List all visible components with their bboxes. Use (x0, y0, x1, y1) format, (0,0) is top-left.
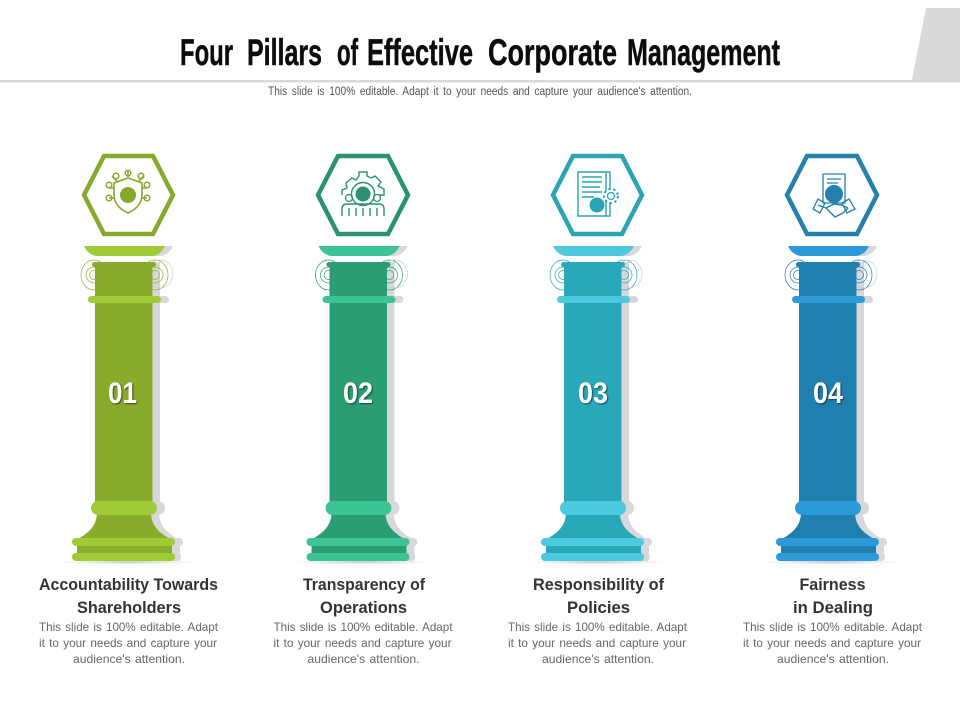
column: pillar 2 (292, 246, 432, 564)
description: pillar 4 (743, 620, 923, 666)
description: pillar 1 (39, 620, 219, 666)
number: 03: 03 (578, 377, 608, 410)
description: pillar 3: This slide is 100% editable. Adapt (508, 620, 688, 634)
panel: pillar 3 (508, 156, 688, 666)
heading: pillar 1 (39, 575, 218, 617)
subtitle: This slide is 100% editable. Adapt it to your needs and capture your audience's attention. (268, 86, 692, 98)
column: pillar 4 (762, 246, 902, 564)
icon: document and gears hexagon (553, 156, 642, 234)
heading: pillar 3: Responsibility of (533, 575, 664, 594)
heading: pillar 1: Accountability Towards (39, 575, 218, 594)
number: 01: 01 (108, 377, 137, 410)
description: pillar 1: it to your needs and capture your (39, 636, 217, 650)
description: pillar 4: This slide is 100% editable. Adapt (743, 620, 923, 634)
title: Effective (367, 32, 473, 73)
heading: pillar 4: in Dealing (793, 598, 873, 617)
description: pillar 1: This slide is 100% editable. Adapt (39, 620, 219, 634)
description: pillar 3 (508, 620, 688, 666)
icon: shield network hexagon (84, 156, 173, 234)
heading: pillar 4: Fairness (800, 575, 866, 594)
number: 04: 04 (813, 377, 843, 410)
heading: pillar 2: Transparency of (303, 575, 425, 594)
title: Pillars (247, 32, 322, 73)
description: pillar 4: it to your needs and capture your (743, 636, 921, 650)
number: 02: 02 (343, 377, 373, 410)
description: pillar 2: it to your needs and capture your (274, 636, 452, 650)
icon: contract handshake hexagon (787, 156, 877, 234)
heading: pillar 1: Shareholders (77, 598, 181, 617)
heading: pillar 2: Operations (320, 598, 407, 617)
description: pillar 4: audience's attention. (777, 652, 889, 666)
title: Corporate (488, 32, 617, 73)
title band rule (0, 8, 960, 82)
heading: pillar 3 (533, 575, 664, 617)
panel: pillar 2 (274, 156, 453, 666)
title (180, 32, 780, 73)
description: pillar 2 (274, 620, 453, 666)
heading: pillar 2 (303, 575, 425, 617)
description: pillar 1: audience's attention. (73, 652, 185, 666)
icon: gear and team hexagon (318, 156, 408, 234)
column: pillar 3 (527, 246, 667, 564)
heading: pillar 4 (793, 575, 873, 617)
title: of (337, 32, 358, 73)
description: pillar 3: it to your needs and capture your (508, 636, 686, 650)
description: pillar 2: This slide is 100% editable. Adapt (274, 620, 453, 634)
description: pillar 2: audience's attention. (308, 652, 420, 666)
title: Four (180, 32, 233, 73)
heading: pillar 3: Policies (567, 598, 630, 617)
title: Management (627, 32, 780, 73)
panel: pillar 1 (39, 156, 219, 666)
description: pillar 3: audience's attention. (542, 652, 654, 666)
column: pillar 1 (58, 246, 198, 564)
panel: pillar 4 (743, 156, 923, 666)
